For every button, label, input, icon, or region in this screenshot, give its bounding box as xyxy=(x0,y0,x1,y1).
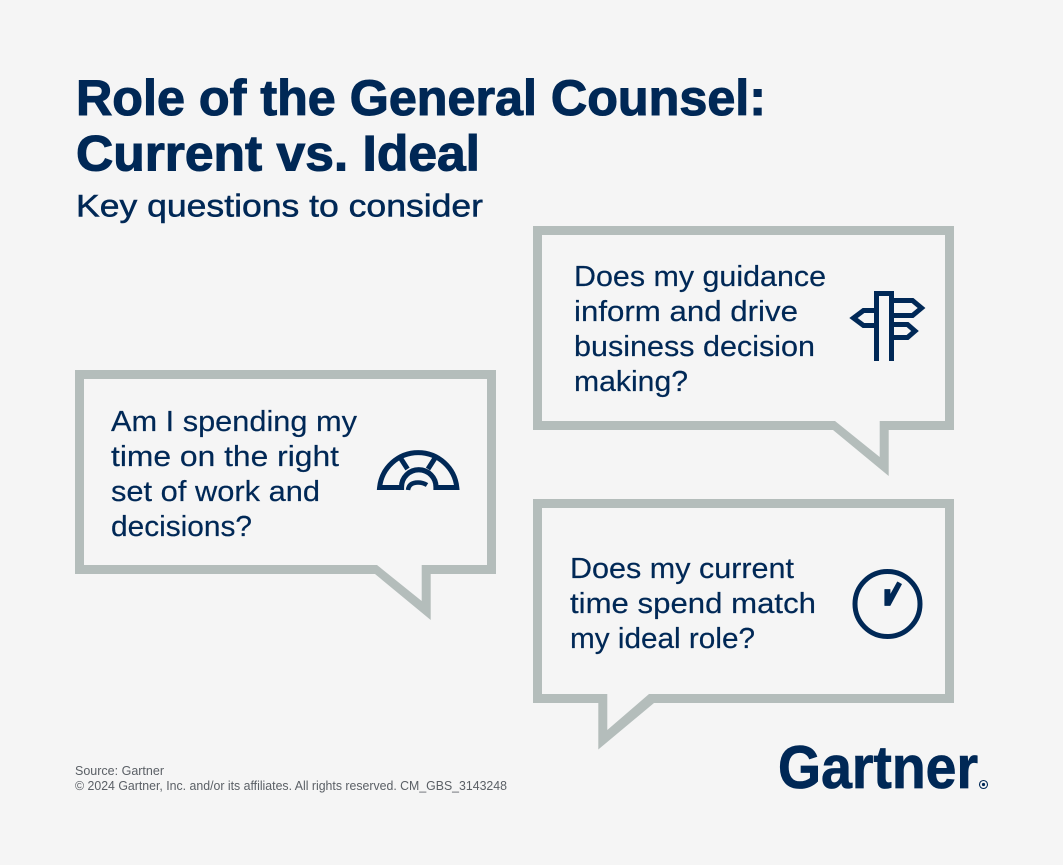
title: Role of the General Counsel: xyxy=(76,70,766,126)
text: guidance question: making? xyxy=(574,366,688,398)
subtitle: Key questions to consider xyxy=(76,188,483,224)
text: time spend question: Does my current xyxy=(570,553,794,585)
title xyxy=(76,70,766,182)
text: guidance question: Does my guidance xyxy=(574,261,826,293)
speech bubble: bottom right xyxy=(533,499,954,750)
speech bubble: left xyxy=(75,370,496,620)
source note: Source: Gartner xyxy=(75,764,164,778)
callout: time on right work question xyxy=(75,370,496,620)
title: Current vs. Ideal xyxy=(76,126,480,182)
text: guidance question: business decision xyxy=(574,331,815,363)
icon: signpost xyxy=(854,294,922,361)
text: guidance question: inform and drive xyxy=(574,296,798,328)
text: time question: time on the right xyxy=(111,441,339,473)
icon: clock xyxy=(855,572,920,636)
source note xyxy=(75,764,507,793)
text: time spend question: time spend match xyxy=(570,588,816,620)
callout: guidance question xyxy=(533,226,954,476)
text: time question: set of work and xyxy=(111,476,320,508)
text: time question: Am I spending my xyxy=(111,406,358,438)
source note: © 2024 Gartner, Inc. and/or its affiliates. All rights reserved. CM_GBS_3143248 xyxy=(75,779,507,793)
text: guidance question xyxy=(574,261,826,398)
text: time question: decisions? xyxy=(111,511,252,543)
logo: Gartner: Gartner xyxy=(778,734,978,801)
callout: time spend question xyxy=(533,499,954,750)
text: time question xyxy=(111,406,358,543)
text: time spend question: my ideal role? xyxy=(570,623,755,655)
icon: gauge xyxy=(380,453,457,490)
speech bubble: top right xyxy=(533,226,954,476)
text: time spend question xyxy=(570,553,816,655)
